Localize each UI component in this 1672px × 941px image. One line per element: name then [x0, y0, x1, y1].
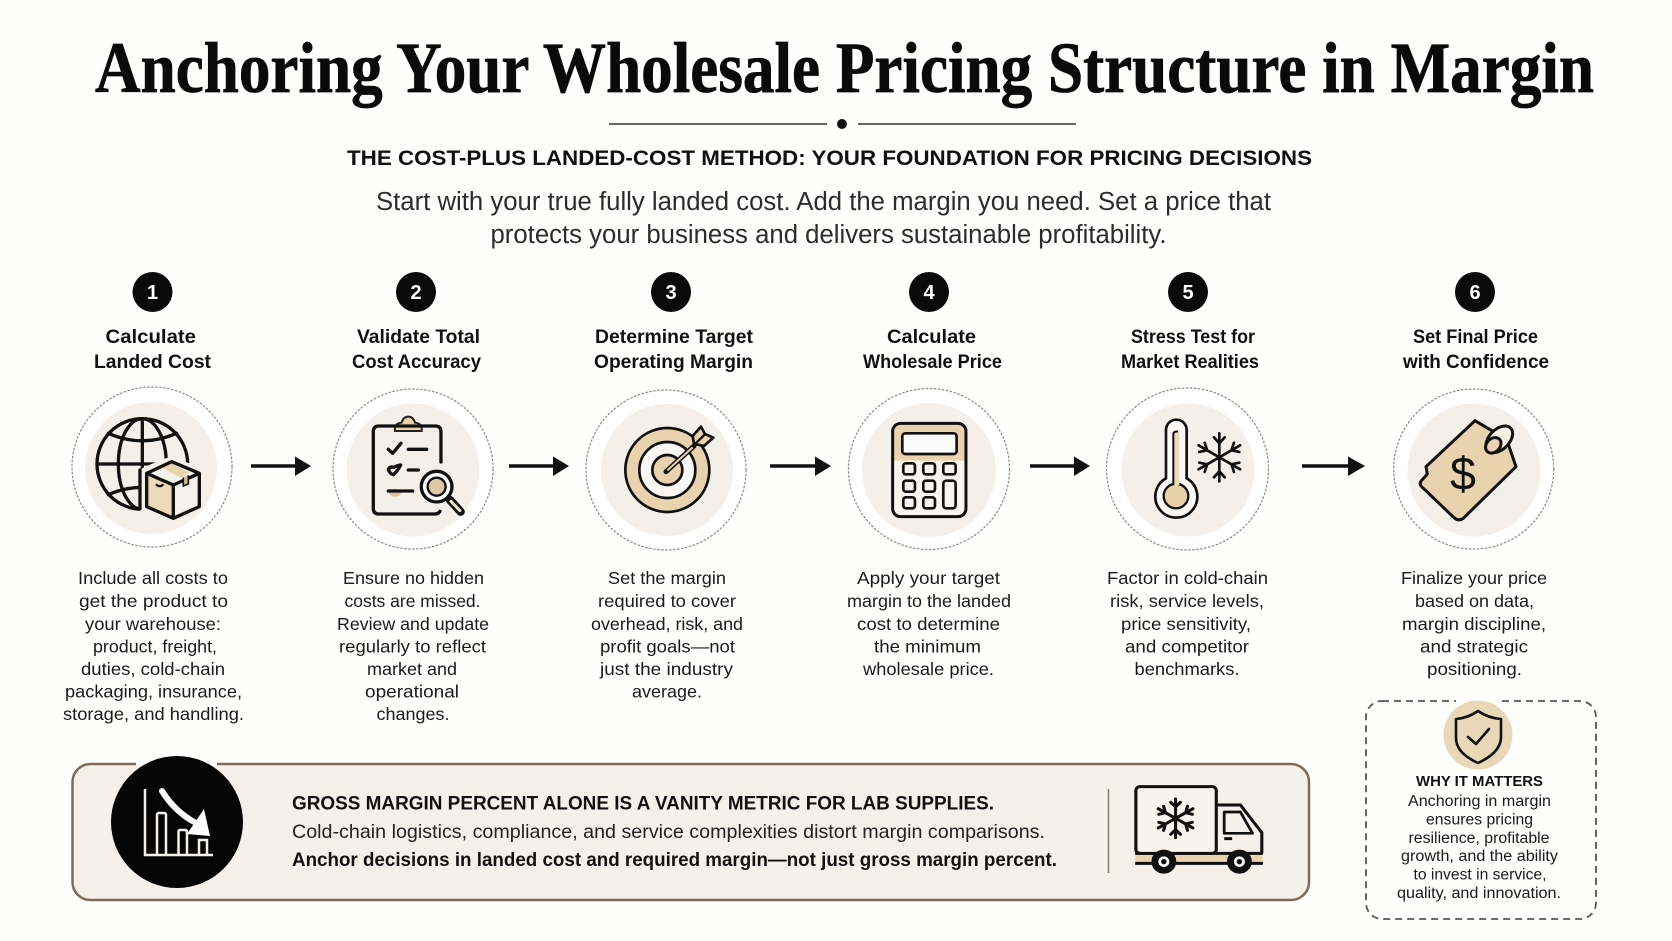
step number 5: 5: [1182, 282, 1194, 304]
step number 5: [1168, 272, 1208, 312]
step 5 description: and competitor: [1125, 636, 1249, 656]
step 5 description: benchmarks.: [1134, 659, 1240, 679]
why it matters text: ensures pricing: [1426, 812, 1533, 828]
icon: thermometer and snowflake: [1106, 388, 1268, 550]
step 4 description: the minimum: [874, 636, 981, 656]
icon: target and arrow: [586, 390, 746, 550]
step number 4: [909, 272, 949, 312]
step 4 description: Apply your target: [857, 568, 1000, 588]
icon: shield with check: [1444, 700, 1512, 770]
step 5 description: price sensitivity,: [1121, 614, 1251, 634]
step 2 heading: [352, 326, 481, 373]
why it matters text: growth, and the ability: [1401, 848, 1558, 865]
step 5: stress test for market realities: [1106, 272, 1268, 679]
icon: declining bar chart: [111, 756, 243, 888]
icon: refrigerated truck: [1135, 787, 1263, 870]
step 4 heading: Wholesale Price: [863, 351, 1002, 373]
step 4: calculate wholesale price: [847, 272, 1011, 679]
why it matters text: Anchoring in margin: [1408, 793, 1551, 810]
panel: why it matters: [1366, 700, 1596, 919]
callout text: [292, 792, 1057, 871]
step 5 description: Factor in cold-chain: [1107, 568, 1268, 588]
arrow 2 to 3: [509, 456, 569, 476]
why it matters text: [1397, 793, 1561, 902]
arrow 5 to 6: [1302, 456, 1365, 476]
step number 1: 1: [147, 282, 158, 304]
step number 1: [132, 272, 172, 312]
step 6 heading: Set Final Price: [1413, 326, 1538, 348]
step 2 description: market and: [367, 659, 457, 679]
callout text: GROSS MARGIN PERCENT ALONE IS A VANITY METRIC FOR LAB SUPPLIES.: [292, 792, 994, 814]
step 3 heading: [594, 326, 753, 373]
icon: globe and box: [72, 387, 232, 547]
step number 3: [651, 272, 691, 312]
step 5 heading: [1121, 326, 1259, 373]
step 6 heading: [1402, 326, 1549, 373]
step 4 heading: Calculate: [887, 326, 976, 348]
step 3: determine target operating margin: [586, 272, 753, 702]
step 2 heading: Validate Total: [357, 326, 480, 348]
step 4 description: wholesale price.: [862, 659, 994, 679]
step number 6: 6: [1469, 282, 1481, 304]
step 1 description: storage, and handling.: [63, 704, 244, 724]
step 2 description: regularly to reflect: [339, 636, 486, 656]
step 1 description: duties, cold-chain: [81, 659, 225, 679]
step 2 description: operational: [365, 682, 459, 702]
step 1 description: your warehouse:: [85, 614, 221, 634]
step 2 description: Review and update: [337, 614, 489, 634]
icon: price tag: [1394, 389, 1554, 549]
step 6 description: based on data,: [1415, 591, 1534, 611]
step 3 description: required to cover: [598, 591, 736, 611]
step 3 description: just the industry: [599, 659, 733, 679]
step 6 heading: with Confidence: [1402, 351, 1549, 373]
step 3 description: overhead, risk, and: [591, 614, 743, 634]
step 5 description: risk, service levels,: [1110, 591, 1264, 611]
step 3 description: average.: [632, 682, 702, 702]
icon: clipboard and magnifier: [333, 389, 493, 549]
arrow 1 to 2: [251, 456, 311, 476]
callout text: Cold-chain logistics, compliance, and service complexities distort margin comparisons.: [292, 821, 1045, 843]
step 4 heading: [863, 326, 1002, 373]
step 5 heading: Market Realities: [1121, 351, 1259, 373]
step 6 description: margin discipline,: [1402, 614, 1546, 634]
step number 4: 4: [923, 282, 935, 304]
step 5 description: [1107, 568, 1268, 679]
arrow 3 to 4: [770, 456, 831, 476]
step 6 description: [1401, 568, 1547, 679]
step 3 description: profit goals—not: [600, 636, 735, 656]
step 2 description: Ensure no hidden: [343, 568, 484, 588]
step 1 description: packaging, insurance,: [65, 682, 242, 702]
step 6: set final price with confidence: [1394, 272, 1554, 679]
step 4 description: [847, 568, 1011, 679]
icon: price tag: $: [1450, 447, 1476, 499]
step number 2: 2: [410, 282, 422, 304]
icon: calculator: [848, 388, 1010, 550]
step 6 description: positioning.: [1427, 659, 1522, 679]
step 2 heading: Cost Accuracy: [352, 351, 481, 373]
why it matters heading: WHY IT MATTERS: [1416, 773, 1543, 790]
step 6 description: Finalize your price: [1401, 568, 1547, 588]
step 6 description: and strategic: [1420, 636, 1528, 656]
step 3 description: Set the margin: [608, 568, 726, 588]
step 3 heading: Determine Target: [595, 326, 753, 348]
step 4 description: cost to determine: [857, 614, 1000, 634]
step number 3: 3: [665, 282, 677, 304]
step 1 description: product, freight,: [93, 636, 217, 656]
intro text: [376, 188, 1271, 249]
step 1 heading: [94, 326, 211, 373]
step number 2: [396, 272, 436, 312]
intro text: Start with your true fully landed cost. Add the margin you need. Set a price that: [376, 188, 1271, 216]
step 1 description: [63, 568, 244, 724]
step 1 description: Include all costs to: [78, 568, 228, 588]
step 3 description: [591, 568, 743, 702]
callout text: Anchor decisions in landed cost and required margin—not just gross margin percent.: [292, 849, 1057, 871]
step 4 description: margin to the landed: [847, 591, 1011, 611]
step number 6: [1455, 272, 1495, 312]
step 1 heading: Calculate: [106, 326, 196, 348]
arrow 4 to 5: [1030, 456, 1090, 476]
step 1 heading: Landed Cost: [94, 351, 211, 373]
step 2 description: costs are missed.: [344, 591, 480, 611]
step 5 heading: Stress Test for: [1131, 326, 1255, 348]
why it matters text: to invest in service,: [1414, 866, 1546, 884]
step 2 description: changes.: [376, 704, 450, 724]
step 1: calculate landed cost: [63, 272, 244, 724]
step 2 description: [337, 568, 489, 724]
step 3 heading: Operating Margin: [594, 351, 753, 373]
subtitle heading: THE COST-PLUS LANDED-COST METHOD: YOUR FOUNDATION FOR PRICING DECISIONS: [347, 147, 1312, 170]
why it matters text: resilience, profitable: [1408, 830, 1550, 847]
step 1 description: get the product to: [79, 591, 228, 611]
why it matters text: quality, and innovation.: [1397, 885, 1561, 902]
intro text: protects your business and delivers sustainable profitability.: [490, 221, 1166, 249]
step 2: validate total cost accuracy: [333, 272, 493, 724]
panel: gross margin callout: [72, 756, 1309, 900]
